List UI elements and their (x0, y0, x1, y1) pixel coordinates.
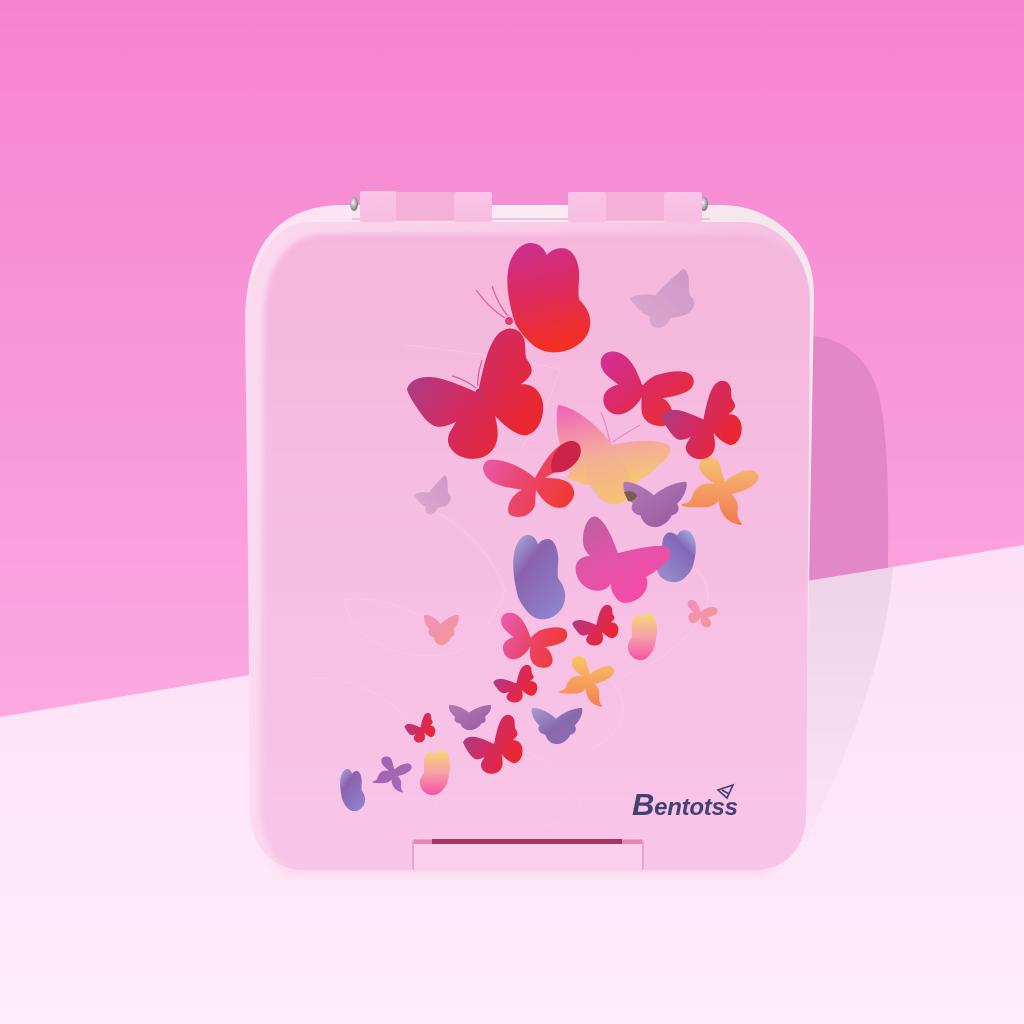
background: pale floor (0, 545, 1024, 1024)
butterfly: violet (533, 709, 581, 743)
box base behind lid (245, 205, 814, 700)
butterfly: purple right (657, 530, 696, 582)
butterfly: red lower (464, 716, 522, 773)
icon: paper plane (718, 785, 733, 798)
right hinge (568, 192, 702, 222)
butterfly: red small (494, 665, 537, 702)
lid face (260, 234, 814, 876)
butterfly: pink-red centre (483, 441, 581, 517)
butterfly: yellow pink right (628, 613, 657, 660)
butterfly: yellow pink lower (420, 750, 450, 795)
butterfly: pink (576, 517, 671, 603)
butterfly: pale top right (631, 270, 693, 327)
butterfly: yellow (557, 405, 670, 512)
hinge pins (350, 197, 708, 211)
butterfly: orange (683, 458, 757, 524)
butterfly: violet small (373, 757, 411, 792)
lunch box (245, 191, 814, 876)
butterfly: right purple-red (663, 382, 741, 458)
butterfly: large purple-red (409, 330, 541, 457)
butterfly: large red (476, 243, 590, 352)
butterfly: purple side (513, 535, 565, 619)
background: pink wall (0, 0, 1024, 730)
floor shadow (800, 567, 893, 842)
butterfly: pale left (415, 476, 450, 514)
butterfly: purple-red small (573, 605, 618, 645)
butterfly: small peach left (425, 616, 458, 644)
butterfly: small peach right (688, 600, 717, 627)
clasp (412, 839, 644, 870)
butterfly: mauve small (450, 706, 490, 730)
base gap shadow (352, 218, 710, 220)
butterfly: upper right red (602, 353, 692, 425)
logo: Bentotss (632, 787, 738, 822)
butterflies (340, 243, 757, 811)
lid rim (246, 222, 810, 870)
butterfly: mauve (624, 483, 685, 526)
floor contact shadow (268, 858, 785, 876)
butterfly: red tiny (405, 713, 435, 742)
wall shadow (800, 335, 888, 592)
butterfly: pink red small (502, 614, 566, 667)
butterfly: orange small (560, 657, 613, 706)
butterfly: purple bottom left (340, 769, 365, 811)
faint embossed outlines (300, 345, 708, 850)
left hinge (360, 191, 492, 222)
